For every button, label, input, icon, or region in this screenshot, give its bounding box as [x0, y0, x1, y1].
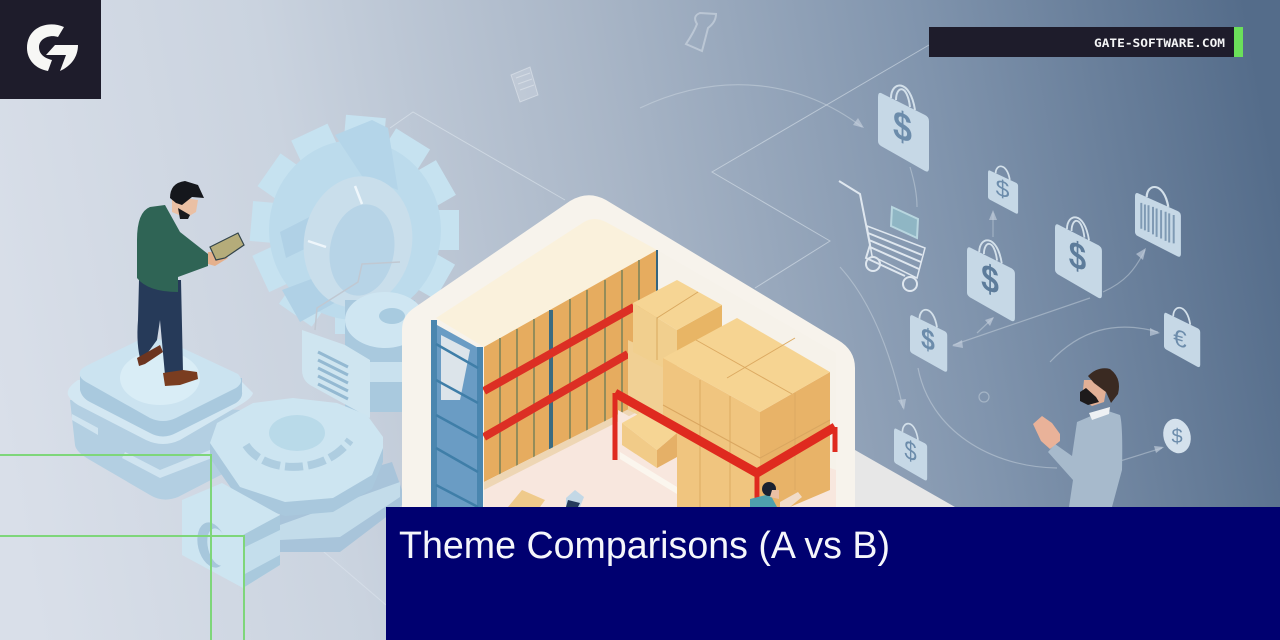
website tag	[929, 27, 1243, 57]
shopping bag 8	[894, 424, 927, 480]
blue ladder rack	[434, 320, 482, 507]
cylinder stack behind warehouse	[345, 292, 425, 412]
sweater	[137, 205, 208, 292]
warehouse cutaway	[402, 195, 955, 507]
upper box stack	[633, 280, 722, 375]
beard	[1080, 388, 1099, 405]
lower body	[70, 400, 240, 500]
connector cube	[182, 483, 280, 588]
cleared floor under barrier	[618, 410, 677, 507]
beard	[178, 208, 190, 219]
large octagonal hub	[210, 398, 402, 552]
shopping bag 1: $	[893, 102, 912, 153]
person applauding	[1033, 368, 1122, 507]
hands	[1033, 416, 1060, 449]
sketch icon: receipt	[511, 67, 538, 102]
outer shell	[402, 195, 855, 507]
left platform	[68, 338, 253, 500]
small pallet box	[620, 413, 677, 494]
right inner wall	[657, 250, 836, 470]
gear illustration	[250, 115, 459, 334]
floor slab outside	[855, 450, 955, 507]
logo tile	[0, 0, 101, 99]
green corner frames	[0, 455, 244, 640]
shopping bag 8: $	[904, 434, 917, 468]
shopping bag 1	[878, 85, 929, 172]
shoes	[137, 345, 163, 366]
shopping bag 2: $	[996, 175, 1010, 204]
large box stack	[663, 318, 830, 507]
floor parcel	[508, 490, 545, 507]
shopping bag 4: $	[1069, 232, 1086, 281]
euro bag: €	[1173, 324, 1187, 354]
lower light bars	[72, 414, 212, 478]
jacket	[1048, 410, 1122, 507]
trousers	[137, 280, 183, 375]
shopping bag 3	[967, 240, 1015, 321]
upper slab side	[80, 375, 242, 436]
sketch icon: floating tag	[686, 13, 716, 51]
standing disc	[120, 351, 200, 405]
shelf pallet	[484, 395, 657, 490]
back box column	[628, 340, 670, 430]
person with tablet	[137, 181, 244, 386]
red barrier	[615, 393, 835, 507]
title banner	[386, 507, 1280, 640]
title banner: Theme Comparisons (A vs B)	[399, 525, 890, 567]
foreground worker	[750, 482, 802, 507]
shopping bag 4	[1055, 217, 1102, 298]
red shelf straps	[484, 307, 634, 437]
device panel with vent	[302, 262, 400, 418]
shirt collar	[1089, 407, 1110, 420]
hair	[170, 181, 204, 205]
website tag: GATE-SOFTWARE.COM	[1094, 36, 1225, 50]
rim plate	[68, 380, 253, 444]
dollar coin: $	[1171, 426, 1183, 448]
flow arrows	[640, 85, 1162, 468]
ceiling panel	[436, 219, 657, 347]
shopping bag 3: $	[981, 255, 999, 303]
upper slab top	[80, 338, 241, 421]
shopping cart icon	[839, 181, 925, 291]
hair	[1088, 368, 1119, 403]
dollar coin	[1159, 416, 1195, 456]
shelving wall	[484, 250, 657, 482]
shelf dividers	[500, 260, 639, 475]
barcode bag	[1135, 187, 1181, 257]
face	[172, 196, 198, 218]
tablet	[210, 233, 244, 260]
arrow heads	[853, 118, 1164, 453]
floor worker	[566, 490, 584, 507]
shopping bag 2	[988, 166, 1018, 214]
warehouse floor	[484, 395, 836, 507]
face	[1082, 380, 1108, 406]
shopping bag 6	[910, 310, 947, 372]
euro bag	[1164, 308, 1200, 367]
hand	[208, 252, 228, 266]
shopping bag 6: $	[921, 321, 935, 358]
thin network lines behind warehouse	[310, 45, 929, 605]
